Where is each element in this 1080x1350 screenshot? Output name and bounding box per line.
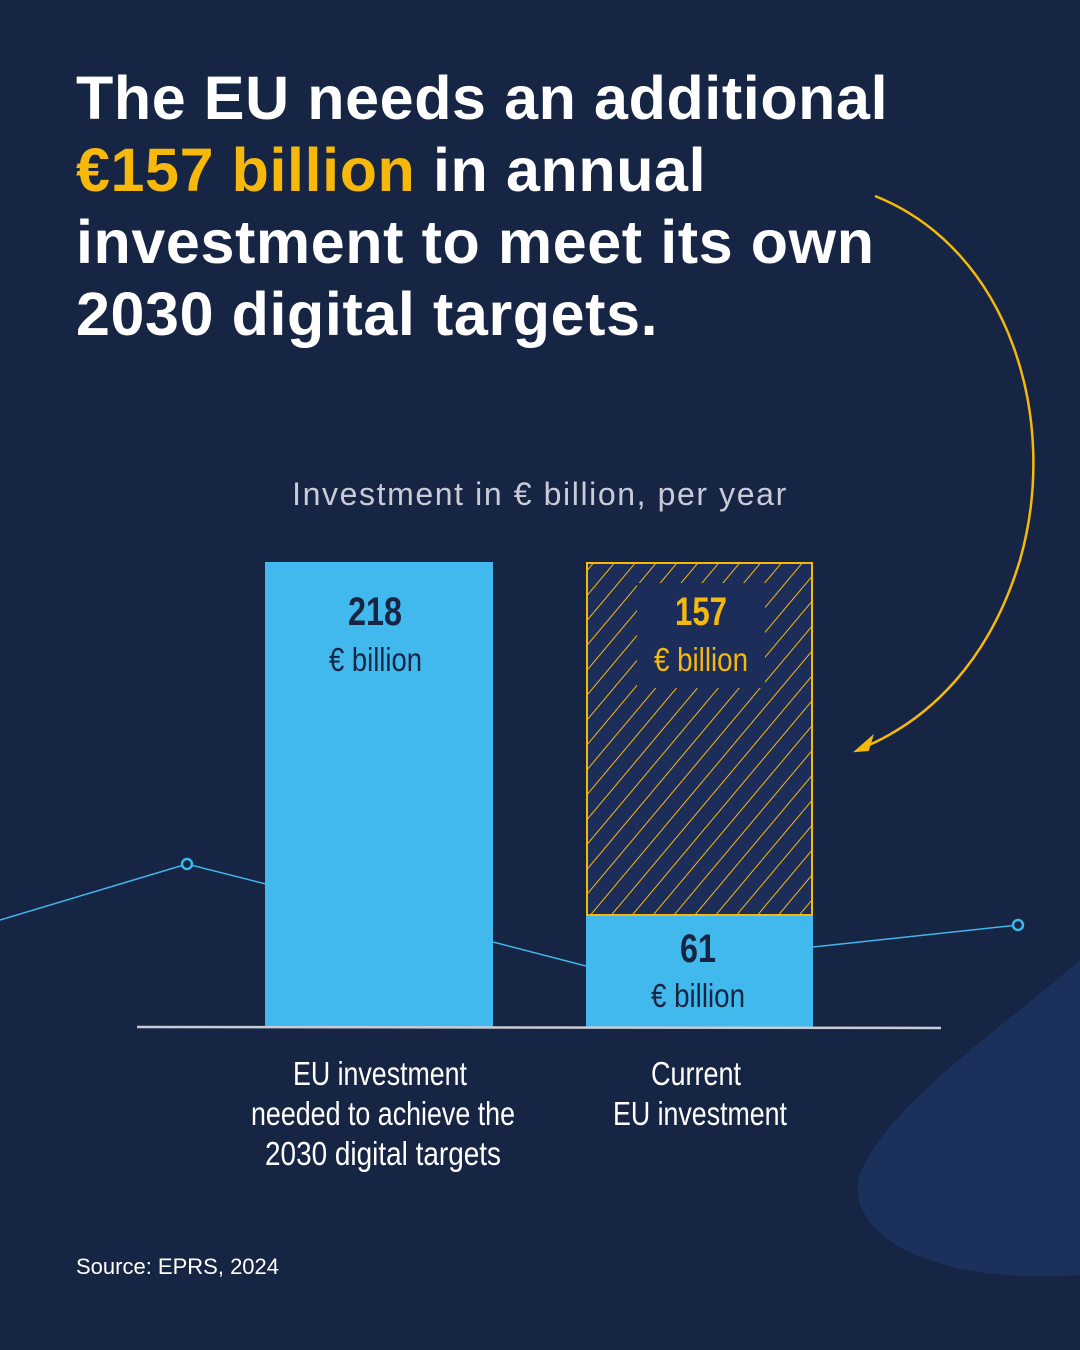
label: needed: needed to achieve the — [251, 1095, 515, 1132]
title: The EU needs an additional — [76, 64, 888, 132]
title: 2030 digital targets. — [76, 280, 658, 348]
baseline — [137, 1027, 941, 1028]
bar: needed 218: 218 — [348, 590, 402, 634]
bar: current 61: 61 — [680, 927, 716, 971]
label: needed: EU investment — [293, 1055, 467, 1092]
bar: needed 218: € billion — [329, 641, 422, 678]
arrow: curved yellow — [856, 196, 1033, 751]
bar: current 61 — [586, 916, 813, 1027]
title: €157 billion in annual — [76, 136, 706, 204]
decorative textured shape — [858, 960, 1080, 1276]
label: current — [613, 1055, 787, 1132]
subtitle: Investment in € billion, per year — [292, 476, 788, 512]
title — [76, 64, 888, 348]
source: Source: EPRS, 2024 — [76, 1254, 279, 1279]
bar: gap 157 hatched: 157 — [675, 590, 727, 634]
label: needed: 2030 digital targets — [265, 1135, 501, 1172]
bar: needed 218 — [265, 562, 493, 1027]
bar: gap 157 hatched — [586, 562, 813, 916]
label: current: Current — [651, 1055, 741, 1092]
title: investment to meet its own — [76, 208, 875, 276]
label: needed — [251, 1055, 515, 1172]
bar: current 61: € billion — [651, 977, 745, 1014]
label: current: EU investment — [613, 1095, 787, 1132]
trend line — [0, 859, 1023, 966]
bar: gap 157 hatched: € billion — [654, 641, 748, 678]
